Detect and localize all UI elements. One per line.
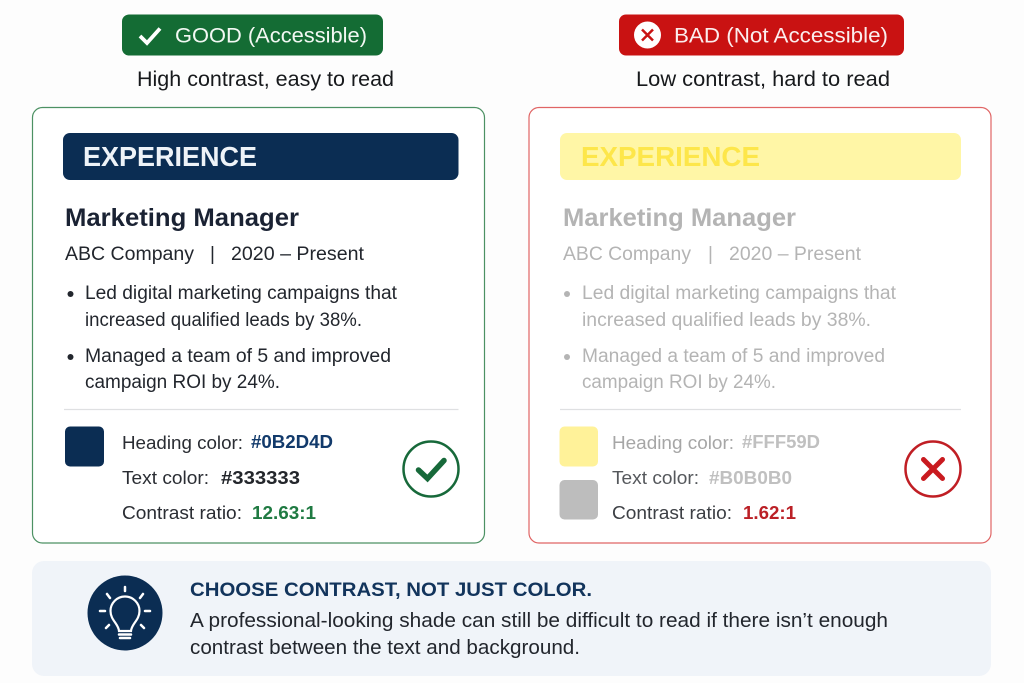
callout heading: CHOOSE CONTRAST, NOT JUST COLOR. [190, 580, 592, 601]
good badge [122, 14, 383, 56]
bullet list: Led digital marketing campaigns that [85, 283, 398, 304]
bullet list: campaign ROI by 24%. [582, 372, 776, 393]
heading color swatch [65, 426, 104, 466]
color details: #B0B0B0 [709, 467, 792, 488]
job title: Marketing Manager [65, 204, 299, 232]
color details: 1.62:1 [743, 502, 796, 523]
company and dates [563, 244, 862, 265]
bullet list: Managed a team of 5 and improved [582, 346, 885, 367]
bad badge label: BAD (Not Accessible) [674, 24, 888, 48]
company and dates: 2020 – Present [231, 244, 365, 265]
color details [612, 431, 820, 523]
text color swatch [560, 480, 598, 520]
bullet list: Managed a team of 5 and improved [85, 346, 391, 367]
bullet list: campaign ROI by 24%. [85, 372, 280, 393]
bullet list [68, 283, 398, 393]
icon: green check circle [404, 442, 458, 496]
color details: Text color: [612, 467, 699, 488]
color details [122, 431, 333, 523]
bad badge [619, 14, 904, 56]
color details: #0B2D4D [251, 431, 333, 452]
bullet list: increased qualified leads by 38%. [85, 310, 362, 331]
section header bar: EXPERIENCE [83, 141, 257, 172]
company and dates: | [210, 244, 215, 265]
bullet list [564, 283, 897, 393]
color details: Contrast ratio: [122, 502, 242, 523]
color details: Text color: [122, 467, 209, 488]
company and dates: 2020 – Present [729, 244, 862, 265]
good subtitle: High contrast, easy to read [137, 68, 394, 91]
bad subtitle: Low contrast, hard to read [636, 68, 890, 91]
callout body: contrast between the text and background. [190, 637, 580, 659]
icon: red x circle [906, 442, 960, 496]
section header bar: EXPERIENCE [581, 141, 760, 172]
company and dates [65, 244, 365, 265]
company and dates: | [708, 244, 713, 265]
color details: 12.63:1 [252, 502, 316, 523]
panel: bad example [529, 108, 991, 543]
bullet list: Led digital marketing campaigns that [582, 283, 897, 304]
job title: Marketing Manager [563, 204, 796, 232]
color details: #FFF59D [742, 431, 820, 452]
color details: Heading color: [612, 432, 734, 453]
icon: light bulb [88, 576, 162, 650]
callout body: A professional-looking shade can still be difficult to read if there isn’t enough [190, 610, 888, 632]
icon: white check [140, 28, 160, 43]
company and dates: ABC Company [65, 244, 195, 265]
good badge label: GOOD (Accessible) [175, 24, 367, 48]
company and dates: ABC Company [563, 244, 691, 265]
color details: Contrast ratio: [612, 502, 732, 523]
heading color swatch [560, 426, 598, 466]
icon: x in white circle [634, 22, 661, 48]
callout body [190, 610, 888, 659]
section header bar [63, 133, 458, 180]
color details: Heading color: [122, 432, 243, 453]
panel: good example [32, 108, 484, 543]
section header bar [560, 133, 961, 180]
callout: contrast tip [32, 561, 991, 676]
color details: #333333 [221, 467, 300, 488]
bullet list: increased qualified leads by 38%. [582, 310, 871, 331]
